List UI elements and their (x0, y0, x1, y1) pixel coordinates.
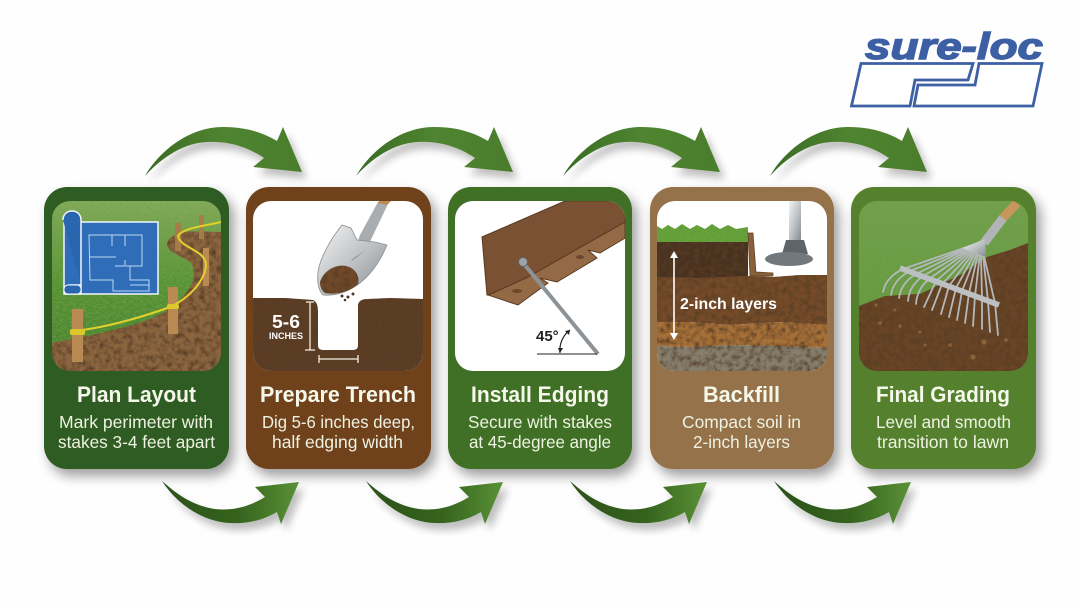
arrow: bottom, plan layout to prepare trench (162, 481, 299, 524)
panel: backfill (650, 187, 834, 469)
label: 45 degree angle (536, 328, 597, 354)
label: trench depth (269, 302, 358, 363)
icon: nail (518, 258, 598, 354)
heading: install edging: Install Edging (471, 382, 609, 407)
label: trench depth: INCHES (269, 331, 303, 341)
text: prepare trench description: half edging width (272, 432, 403, 452)
arrow: top, plan layout to prepare trench (145, 127, 302, 176)
image: lawn with stakes and blueprint (52, 201, 221, 371)
text: install edging description (468, 412, 612, 452)
icon: tamper (765, 201, 813, 266)
label: 2-inch layers (670, 251, 777, 340)
arrow: top, prepare trench to install edging (356, 127, 513, 176)
text: plan layout description: Mark perimeter with (59, 412, 213, 432)
image: rake on soil (859, 201, 1028, 371)
image: edging with nail at 45 degrees (455, 201, 625, 371)
icon: rake (883, 203, 1017, 335)
text: final grading description: Level and smooth (876, 412, 1011, 432)
text: backfill description: 2-inch layers (693, 432, 790, 452)
icon: shovel (318, 201, 391, 301)
label: 2-inch layers: 2-inch layers (680, 296, 777, 313)
logo: sure-loc: sure-loc (865, 26, 1044, 67)
heading: backfill: Backfill (703, 382, 780, 407)
arrow: top, install edging to backfill (563, 127, 720, 176)
text: plan layout description (58, 412, 215, 452)
label: 45 degree angle: 45° (536, 328, 559, 345)
text: install edging description: Secure with stakes (468, 412, 612, 432)
arrow: top, backfill to final grading (770, 127, 927, 176)
arrow: bottom, install edging to backfill (570, 481, 707, 524)
image: soil layers and tamper (657, 201, 827, 371)
heading: final grading: Final Grading (876, 382, 1010, 407)
text: backfill description: Compact soil in (682, 412, 801, 432)
arrow: bottom, prepare trench to install edging (366, 481, 503, 524)
heading: prepare trench: Prepare Trench (260, 382, 416, 407)
icon: blueprint (63, 211, 158, 294)
panel: final grading (851, 187, 1036, 469)
text: install edging description: at 45-degree angle (469, 432, 611, 452)
text: plan layout description: stakes 3-4 feet apart (58, 432, 215, 452)
text: backfill description (682, 412, 801, 452)
text: prepare trench description: Dig 5-6 inches deep, (262, 412, 415, 432)
image: shovel and trench (253, 201, 423, 371)
logo: sure-loc (852, 26, 1044, 106)
heading: plan layout: Plan Layout (77, 382, 197, 407)
text: prepare trench description (262, 412, 415, 452)
icon: metal edging (482, 201, 625, 305)
icon: edging profile (748, 233, 773, 276)
panel: prepare trench (246, 187, 431, 469)
panel: install edging (448, 187, 632, 469)
panel: plan layout (44, 187, 229, 469)
text: final grading description (876, 412, 1011, 452)
text: final grading description: transition to lawn (877, 432, 1009, 452)
arrow: bottom, backfill to final grading (774, 481, 911, 524)
label: trench depth: 5-6 (272, 312, 300, 332)
